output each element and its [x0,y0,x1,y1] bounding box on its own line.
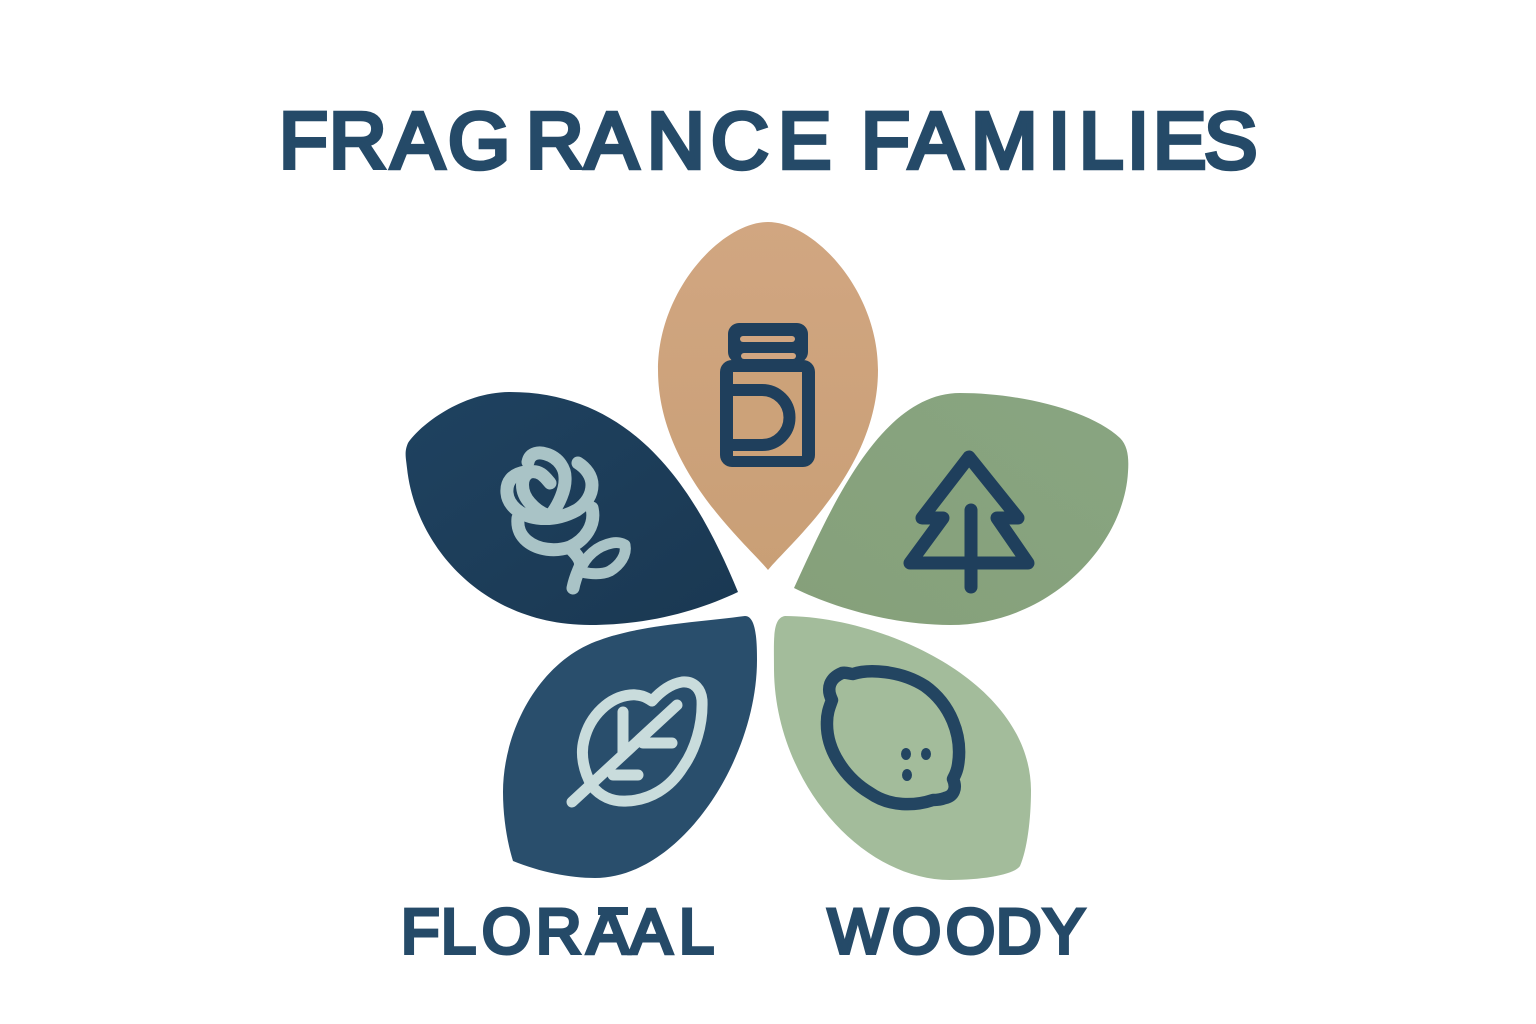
icon: lemon [827,671,959,804]
label: floral: FLORAAL [401,897,714,967]
panel: top petal [658,222,878,570]
panel: floral petal [406,392,738,625]
panel: citrus petal [774,616,1031,880]
panel: woody-tree petal [794,393,1128,625]
icon: rose [507,453,625,588]
icon: pine tree [910,457,1028,587]
icon: perfume jar [720,323,815,467]
label: woody: WOODY [828,897,1085,967]
panel: fresh leaf petal [503,616,757,878]
title: FRAGRANCEFAMILIES [279,96,1257,185]
icon: leaf [572,682,702,802]
